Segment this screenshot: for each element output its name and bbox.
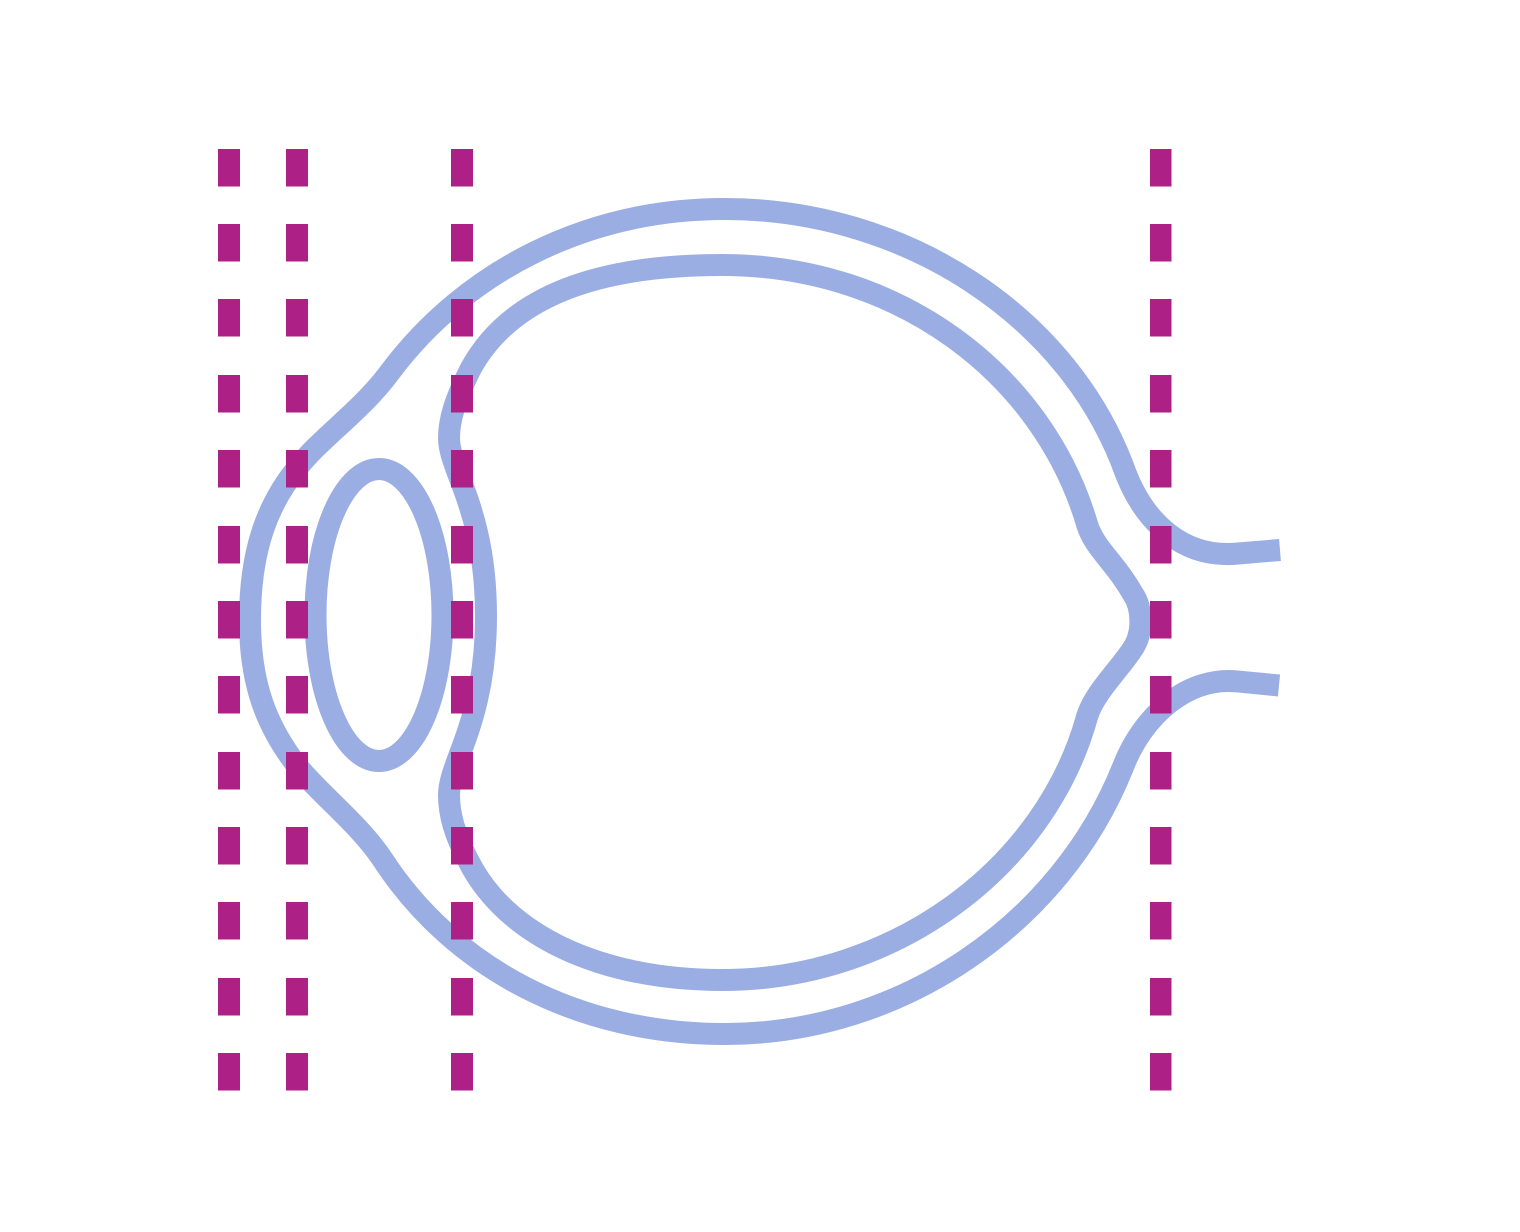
dashed line 3 xyxy=(451,149,473,1090)
dashed line 4 xyxy=(1150,149,1172,1090)
dashed line 2 xyxy=(286,149,308,1090)
eye outline: inner wall xyxy=(449,265,1140,980)
lens xyxy=(316,469,442,761)
dashed line 1 xyxy=(218,149,240,1090)
eye outline: outer wall with optic nerve xyxy=(250,209,1280,1034)
